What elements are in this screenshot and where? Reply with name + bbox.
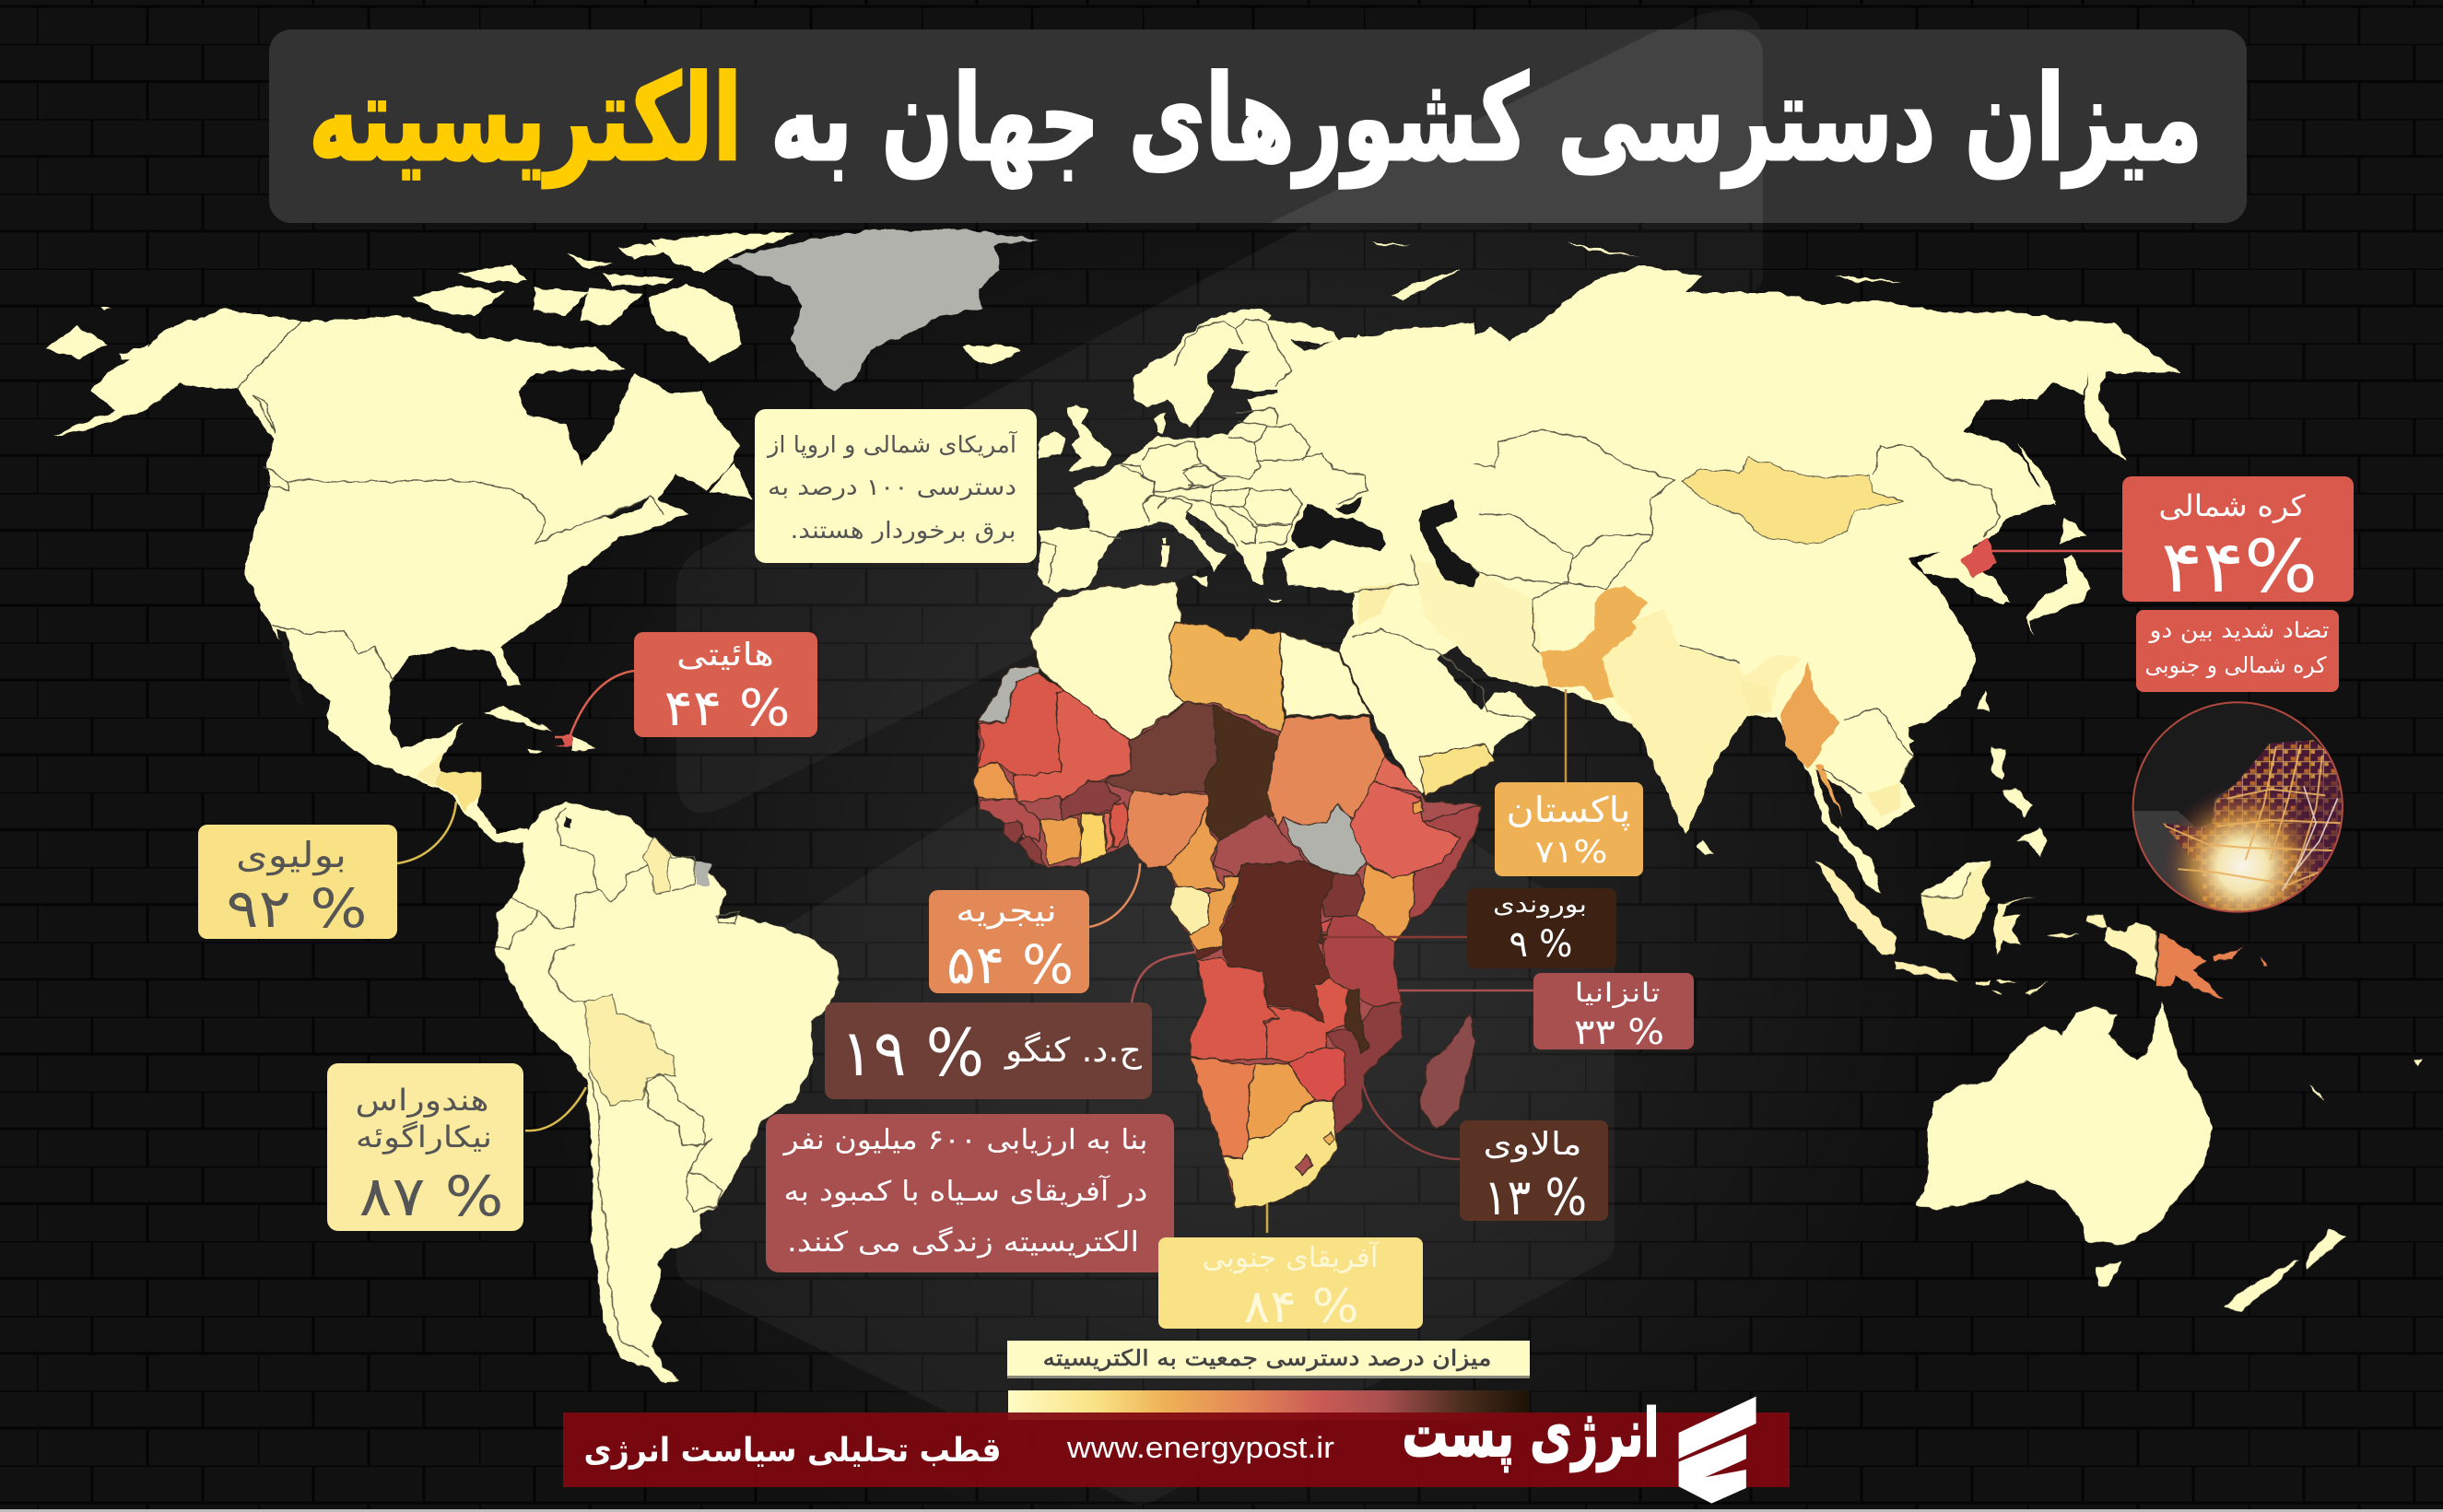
callout: south africa: ۸۴ % bbox=[1244, 1280, 1358, 1333]
night lights circle of korean peninsula bbox=[2132, 701, 2343, 913]
legend gradient bar bbox=[1008, 1390, 1530, 1420]
callout: south africa: آفریقای جنوبی bbox=[1202, 1241, 1380, 1274]
french guiana bbox=[695, 861, 711, 886]
callout: north korea: ۴۴% bbox=[2161, 526, 2318, 609]
java bbox=[1895, 961, 1958, 982]
benin bbox=[1110, 802, 1128, 847]
title panel bbox=[269, 29, 2247, 223]
australia bbox=[1917, 1002, 2213, 1245]
footer website: www.energypost.ir bbox=[1066, 1431, 1334, 1464]
ethiopia bbox=[1349, 780, 1460, 877]
callout: tanzania: تانزانیا bbox=[1574, 978, 1661, 1008]
callout: malawi: ۱۳ % bbox=[1484, 1168, 1587, 1226]
callout: north south contrast: کره شمالی و جنوبی bbox=[2145, 652, 2327, 678]
callout: tanzania: ۳۳ % bbox=[1574, 1012, 1664, 1052]
callout: north south contrast: تضاد شدید بین دو bbox=[2148, 617, 2330, 643]
legend: میزان درصد دسترسی جمعیت به الکتریسیته bbox=[1043, 1345, 1491, 1371]
callout: honduras and nicaragua: هندوراس bbox=[356, 1083, 488, 1118]
british isles and islands bbox=[1039, 405, 1283, 603]
burundi bbox=[1321, 933, 1332, 947]
callout: north america and europe note bbox=[755, 409, 1037, 563]
callout: north south contrast bbox=[2136, 610, 2339, 692]
map: north america and greenland bbox=[46, 229, 1039, 842]
pakistan bbox=[1541, 586, 1648, 699]
map: southeast asia and oceania bbox=[1815, 747, 2422, 1311]
callout: pakistan bbox=[1495, 782, 1643, 876]
caspian sea bbox=[1418, 499, 1478, 587]
swaziland bbox=[1325, 1132, 1335, 1145]
map: europe bbox=[1037, 309, 1474, 603]
callout: nigeria bbox=[929, 890, 1089, 996]
libya bbox=[1170, 624, 1286, 733]
african landmass underlay bbox=[974, 668, 1481, 1209]
callout: malawi: مالاوی bbox=[1484, 1126, 1581, 1163]
burkina faso bbox=[1061, 780, 1119, 821]
tasmania bbox=[2096, 1261, 2121, 1286]
callout: bolivia: ۹۲ % bbox=[227, 877, 367, 940]
haiti bbox=[554, 735, 573, 746]
callout: south africa bbox=[1158, 1237, 1423, 1333]
egypt bbox=[1279, 633, 1370, 715]
angola bbox=[1190, 958, 1279, 1061]
callout: malawi bbox=[1460, 1120, 1608, 1226]
sumatra bbox=[1815, 861, 1897, 955]
iran bbox=[1411, 559, 1548, 687]
mongolia bbox=[1682, 457, 1904, 545]
callout: honduras and nicaragua: نیکاراگوئه bbox=[356, 1119, 492, 1155]
islands bbox=[1373, 241, 2091, 856]
western sahara bbox=[978, 668, 1039, 722]
callout: bolivia bbox=[198, 825, 397, 940]
callout: pakistan: پاکستان bbox=[1506, 790, 1631, 830]
new zealand bbox=[2224, 1058, 2422, 1311]
republic of congo bbox=[1187, 877, 1241, 950]
great lakes water bbox=[604, 497, 650, 518]
arctic islands bbox=[46, 234, 794, 753]
black sea bbox=[1292, 504, 1387, 551]
uganda bbox=[1323, 874, 1364, 917]
malawi bbox=[1345, 990, 1368, 1053]
callout: north america and europe note: آمریکای شمالی و اروپا از bbox=[766, 430, 1017, 459]
malay peninsula bbox=[1837, 826, 1881, 894]
kenya bbox=[1357, 863, 1415, 945]
rwanda bbox=[1321, 920, 1333, 932]
tanzania bbox=[1323, 915, 1401, 1008]
sudan bbox=[1267, 718, 1385, 830]
callout: burundi bbox=[1467, 888, 1616, 968]
greenland bbox=[726, 229, 1039, 391]
connector lines bbox=[397, 551, 2122, 1233]
sierra leone bbox=[1004, 821, 1024, 844]
callout: north america and europe note: برق برخوردار هستند. bbox=[791, 517, 1016, 544]
legend bbox=[1007, 1341, 1530, 1420]
callout: tanzania bbox=[1533, 973, 1694, 1052]
callout: sub-saharan africa note: در آفریقای سـیاه با کمبود به bbox=[783, 1175, 1148, 1208]
callout: north america and europe note: دسترسی ۱۰۰ درصد به bbox=[768, 474, 1016, 500]
callout: bolivia: بولیوی bbox=[236, 835, 346, 876]
zimbabwe bbox=[1288, 1047, 1345, 1100]
mauritania bbox=[978, 673, 1063, 776]
central african republic bbox=[1213, 814, 1305, 877]
icon: brand logo bbox=[1679, 1397, 1756, 1504]
footer tagline: قطب تحلیلی سیاست انرژی bbox=[584, 1432, 1001, 1470]
callout: burundi: بوروندی bbox=[1493, 891, 1587, 919]
south africa bbox=[1223, 1100, 1338, 1209]
north korea bbox=[1961, 537, 1995, 578]
iceland bbox=[963, 344, 1020, 365]
djibouti bbox=[1415, 800, 1424, 813]
honduras and guatemala bbox=[436, 772, 481, 812]
callout: honduras and nicaragua bbox=[327, 1063, 523, 1231]
zambia bbox=[1264, 979, 1349, 1063]
liberia bbox=[1018, 835, 1046, 868]
north africa bbox=[1029, 581, 1187, 741]
nigeria bbox=[1123, 791, 1208, 868]
brand name: انرژی پست bbox=[1403, 1394, 1659, 1472]
callout: haiti: ۴۴ % bbox=[664, 679, 791, 737]
borneo bbox=[1920, 862, 1991, 941]
philippines bbox=[1991, 747, 2047, 857]
chad bbox=[1204, 706, 1279, 842]
mali bbox=[1013, 689, 1131, 802]
gabon bbox=[1169, 886, 1208, 933]
mozambique bbox=[1326, 1002, 1402, 1136]
callout: honduras and nicaragua: ۸۷ % bbox=[359, 1165, 503, 1229]
map: south america bbox=[494, 802, 840, 1384]
title text yellow: الکتریسیته bbox=[309, 51, 742, 188]
botswana bbox=[1249, 1063, 1316, 1141]
papua new guinea bbox=[2156, 932, 2224, 999]
somalia bbox=[1411, 804, 1481, 920]
bangladesh bbox=[1740, 679, 1770, 716]
callout: north korea: کره شمالی bbox=[2158, 488, 2306, 523]
callout: dr congo: ۱۹ % bbox=[840, 1015, 984, 1091]
eritrea bbox=[1373, 755, 1420, 792]
callout: nigeria: ۵۴ % bbox=[946, 933, 1074, 996]
footer bar bbox=[563, 1394, 1790, 1504]
callout: sub-saharan africa note: بنا به ارزیابی ۶۰۰ میلیون نفر bbox=[781, 1124, 1148, 1156]
callout: pakistan: ۷۱% bbox=[1535, 834, 1607, 871]
cambodia bbox=[1865, 783, 1900, 816]
syria bbox=[1357, 584, 1396, 626]
map: africa and middle east bbox=[974, 581, 1493, 1209]
niger bbox=[1102, 703, 1217, 795]
map: eurasia bbox=[1274, 241, 2179, 875]
callout: dr congo bbox=[825, 1002, 1152, 1099]
cameroon bbox=[1166, 807, 1223, 889]
callout: dr congo: ج.د. کنگو bbox=[1004, 1031, 1143, 1070]
senegal bbox=[974, 762, 1016, 800]
dr congo bbox=[1196, 861, 1335, 1023]
legend title bbox=[1007, 1341, 1530, 1378]
myanmar bbox=[1781, 662, 1843, 818]
borders bbox=[237, 321, 664, 680]
india bbox=[1602, 609, 1801, 835]
callout: sub-saharan africa note: الکتریسیته زندگی می کنند. bbox=[787, 1226, 1139, 1259]
sulawesi bbox=[1993, 896, 2038, 955]
papua indonesia bbox=[2104, 922, 2157, 982]
guyana bbox=[642, 837, 671, 895]
callout: burundi: ۹ % bbox=[1509, 923, 1572, 966]
guinea bbox=[981, 800, 1041, 842]
small islands bbox=[1976, 914, 2107, 996]
togo bbox=[1104, 814, 1112, 851]
madagascar bbox=[1420, 1014, 1475, 1129]
namibia bbox=[1190, 1057, 1255, 1159]
callout: north korea bbox=[2122, 476, 2354, 609]
bolivia bbox=[584, 993, 675, 1106]
south sudan bbox=[1284, 804, 1366, 874]
callout: sub-saharan africa note bbox=[766, 1114, 1174, 1272]
callout: haiti bbox=[634, 632, 817, 737]
ghana bbox=[1081, 814, 1108, 865]
lesotho bbox=[1296, 1155, 1314, 1174]
world map bbox=[46, 229, 2422, 1384]
callout: nigeria: نیجریه bbox=[956, 893, 1057, 930]
callout: haiti: هائیتی bbox=[676, 637, 774, 674]
cote d'ivoire bbox=[1041, 818, 1081, 865]
yemen bbox=[1420, 744, 1493, 797]
